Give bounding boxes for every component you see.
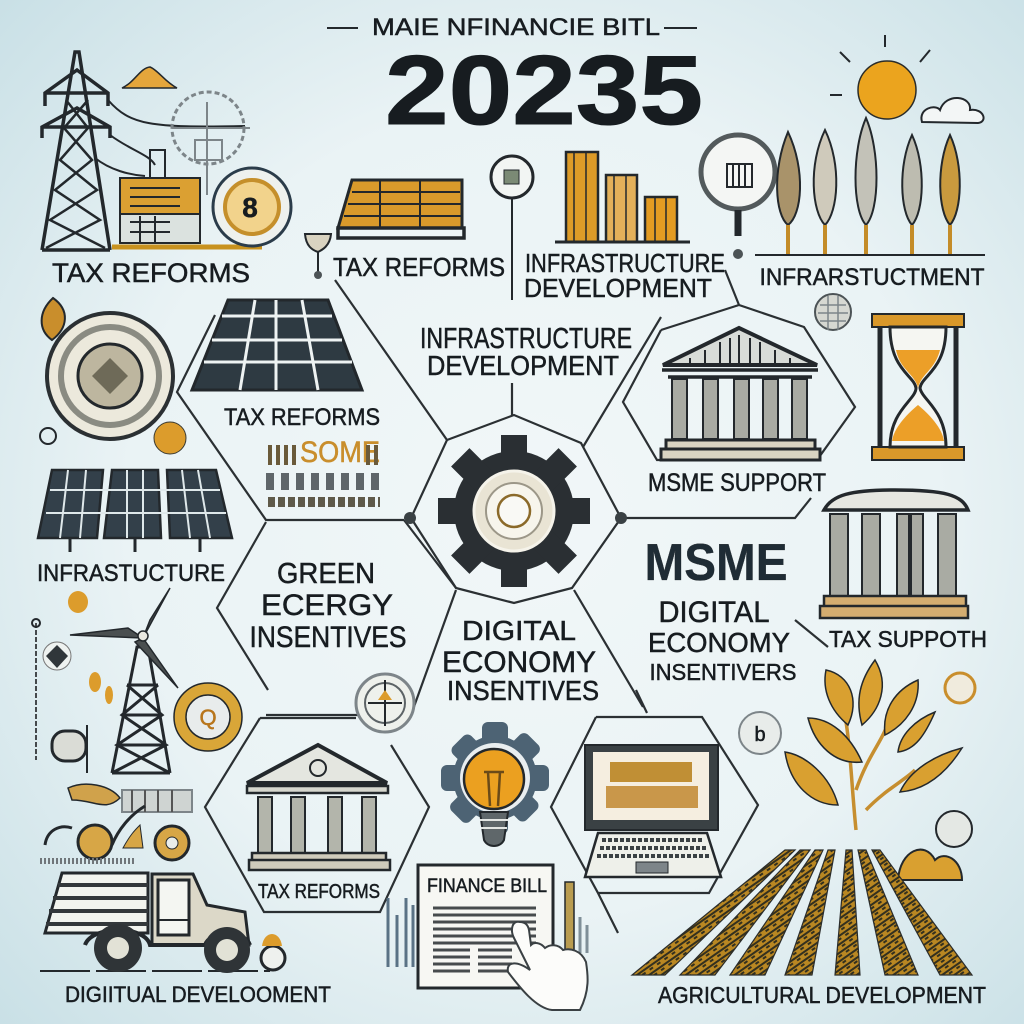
label: infrastructure development 1: DEVELOPMENT (524, 273, 712, 303)
icon: orange columns (555, 152, 690, 242)
label: tax reforms 2: TAX REFORMS (333, 252, 505, 282)
icon: dial (40, 313, 186, 454)
label: tax supporth: TAX SUPPOTH (829, 626, 987, 652)
hexagon network lines (177, 270, 855, 933)
label: msme support: MSME SUPPORT (648, 469, 826, 497)
label: infrastructure development 2: INFRASTRUCTURE (420, 323, 632, 355)
title: MAIE NFINANCIE BITL (372, 14, 660, 41)
label: green energy incentives (250, 558, 406, 654)
label: digital economy insentives: DIGITAL (462, 615, 576, 646)
icon: row of trees (755, 118, 985, 255)
chart: small bars (268, 436, 380, 502)
icon: machinery (40, 784, 192, 861)
label: msme: MSME (644, 534, 788, 592)
label: digital economy insentives: ECONOMY (442, 646, 596, 679)
icon: leaf (42, 298, 65, 340)
icon: round badge (815, 294, 851, 330)
icon: wind turbine (32, 588, 178, 773)
icon: central gear (438, 435, 590, 587)
icon: plant (785, 660, 975, 880)
icon: finance bill document: FINANCE BILL (427, 876, 547, 897)
icon: laptop: b (754, 724, 766, 746)
icon: temple 3 (247, 745, 390, 870)
label: infrastructurent: INFRARSTUCTMENT (760, 264, 985, 291)
icon: compass (356, 674, 414, 732)
chart: small bars: SOME (300, 436, 380, 469)
icon: laptop (585, 712, 781, 877)
label: infrastructure development 1: INFRASTRUCTURE (525, 248, 725, 278)
label: digital economy insentives: INSENTIVES (447, 675, 599, 706)
label: infrastructure development 2 (420, 323, 632, 381)
label: digiltual development: DIGIITUAL DEVELOOMENT (65, 982, 331, 1007)
label: infrastructure development 2: DEVELOPMENT (427, 350, 619, 381)
icon: ledger (338, 180, 464, 238)
icon: finance bill document (388, 865, 587, 988)
icon: factory and coin: 8 (242, 192, 258, 223)
icon: solar panel large (192, 300, 362, 390)
label: green energy incentives: INSENTIVES (250, 621, 406, 654)
icon: temple 1 (661, 328, 820, 460)
label: digital economy insentivers: DIGITAL (658, 596, 770, 629)
icon: power tower (42, 52, 245, 250)
icon: pointing hand (508, 922, 588, 1010)
icon: gold ring (52, 591, 242, 773)
label: infrastructure development 1 (524, 248, 725, 303)
label: digital economy insentivers: ECONOMY (648, 627, 790, 658)
label: agricultural development: AGRICULTURAL DEVELOPMENT (658, 982, 986, 1008)
label: tax reforms 3: TAX REFORMS (224, 404, 380, 431)
label: green energy incentives: GREEN (277, 558, 375, 590)
label: digital economy insentivers: INSENTIVERS (650, 659, 796, 685)
icon: factory and coin (112, 67, 291, 247)
label: digital economy insentivers (648, 596, 796, 685)
label: tax reforms 4: TAX REFORMS (258, 881, 380, 903)
title: 20235 (385, 35, 703, 145)
label: digital economy insentives (442, 615, 599, 706)
icon: sun and cloud (830, 35, 984, 123)
icon: gold ring: Q (199, 705, 217, 730)
label: infrastructure: INFRASTUCTURE (37, 560, 225, 587)
label: tax reforms 1: TAX REFORMS (52, 258, 250, 288)
icon: magnifying glass (701, 135, 775, 259)
icon: temple 2 (820, 490, 968, 618)
icon: solar panels row (38, 470, 232, 552)
icon: bulb with gear (441, 722, 549, 846)
icon: truck (40, 873, 285, 973)
label: green energy incentives: ECERGY (261, 589, 393, 622)
icon: crop field rows (632, 850, 972, 975)
icon: pin and hourglass cup (305, 156, 533, 300)
icon: hourglass (872, 314, 964, 460)
title (327, 14, 703, 145)
